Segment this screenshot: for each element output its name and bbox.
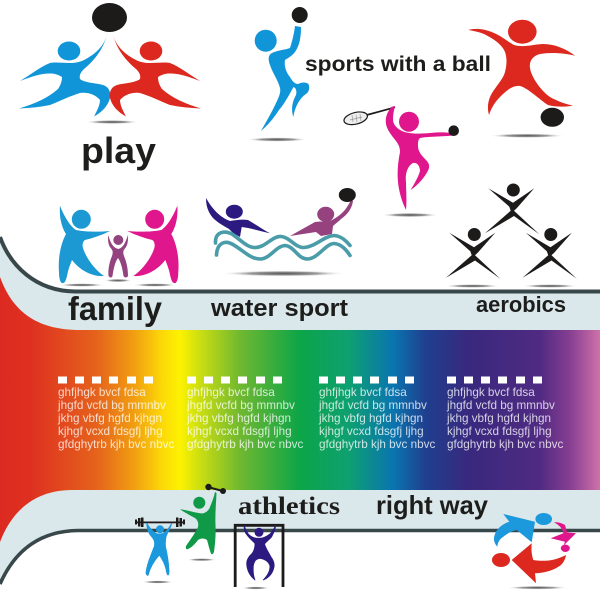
text block 4 [446, 376, 563, 451]
heading: family: family [68, 290, 163, 327]
text block 2: jkhg vbfg hgfd kjhgn [186, 412, 291, 425]
text block 1: jhgfd vcfd bg mmnbv [57, 399, 166, 412]
heading: athletics: athletics [238, 493, 340, 520]
icon: circular arrows [492, 513, 576, 590]
figure: dumbbell lifter [180, 484, 226, 561]
rainbow panel [0, 277, 600, 542]
text block 1: gfdghytrb kjh bvc nbvc [58, 438, 174, 451]
figure: tennis player [343, 106, 459, 217]
text block 4: ghfjhgk bvcf fdsa [447, 386, 535, 399]
text block 4: jhgfd vcfd bg mmnbv [446, 399, 555, 412]
text block 2 [186, 376, 303, 451]
figures: family [59, 206, 179, 287]
red player [110, 33, 201, 116]
heading: right way: right way [376, 490, 489, 520]
text block 3: jkhg vbfg hgfd kjhgn [318, 412, 423, 425]
figures: aerobics [444, 184, 578, 288]
text block 3 [318, 376, 435, 451]
heading: water sport: water sport [210, 295, 348, 322]
light band [0, 237, 600, 585]
text block 2: ghfjhgk bvcf fdsa [187, 386, 275, 399]
bottom band edge [0, 530, 600, 584]
shadow [85, 120, 139, 124]
text block 2: jhgfd vcfd bg mmnbv [186, 399, 295, 412]
text block 3: kjhgf vcxd fdsgfj ljhg [319, 425, 424, 438]
ball [92, 3, 127, 32]
heading: aerobics: aerobics [476, 292, 566, 317]
text block 4: jkhg vbfg hgfd kjhgn [446, 412, 551, 425]
top band edge [0, 237, 600, 292]
figure: basketball player [246, 7, 309, 142]
text block 1 [57, 376, 174, 451]
figures: water sport [206, 188, 356, 276]
figure: red kicker [468, 20, 575, 138]
heading: sports with a ball: sports with a ball [305, 53, 491, 76]
text block 3: gfdghytrb kjh bvc nbvc [319, 438, 435, 451]
text block 4: gfdghytrb kjh bvc nbvc [447, 438, 563, 451]
text block 2: kjhgf vcxd fdsgfj ljhg [187, 425, 292, 438]
text block 2: gfdghytrb kjh bvc nbvc [187, 438, 303, 451]
figure: weightlifter [135, 518, 185, 584]
text block 3: jhgfd vcfd bg mmnbv [318, 399, 427, 412]
text block 4: kjhgf vcxd fdsgfj ljhg [447, 425, 552, 438]
text block 1: ghfjhgk bvcf fdsa [58, 386, 146, 399]
text block 1: kjhgf vcxd fdsgfj ljhg [58, 425, 163, 438]
text block 3: ghfjhgk bvcf fdsa [319, 386, 407, 399]
heading: play: play [81, 130, 156, 171]
text block 1: jkhg vbfg hgfd kjhgn [57, 412, 162, 425]
figures: play [19, 3, 201, 124]
blue player [19, 33, 110, 116]
waves [215, 232, 350, 259]
figure: pull-up bar [235, 525, 283, 590]
